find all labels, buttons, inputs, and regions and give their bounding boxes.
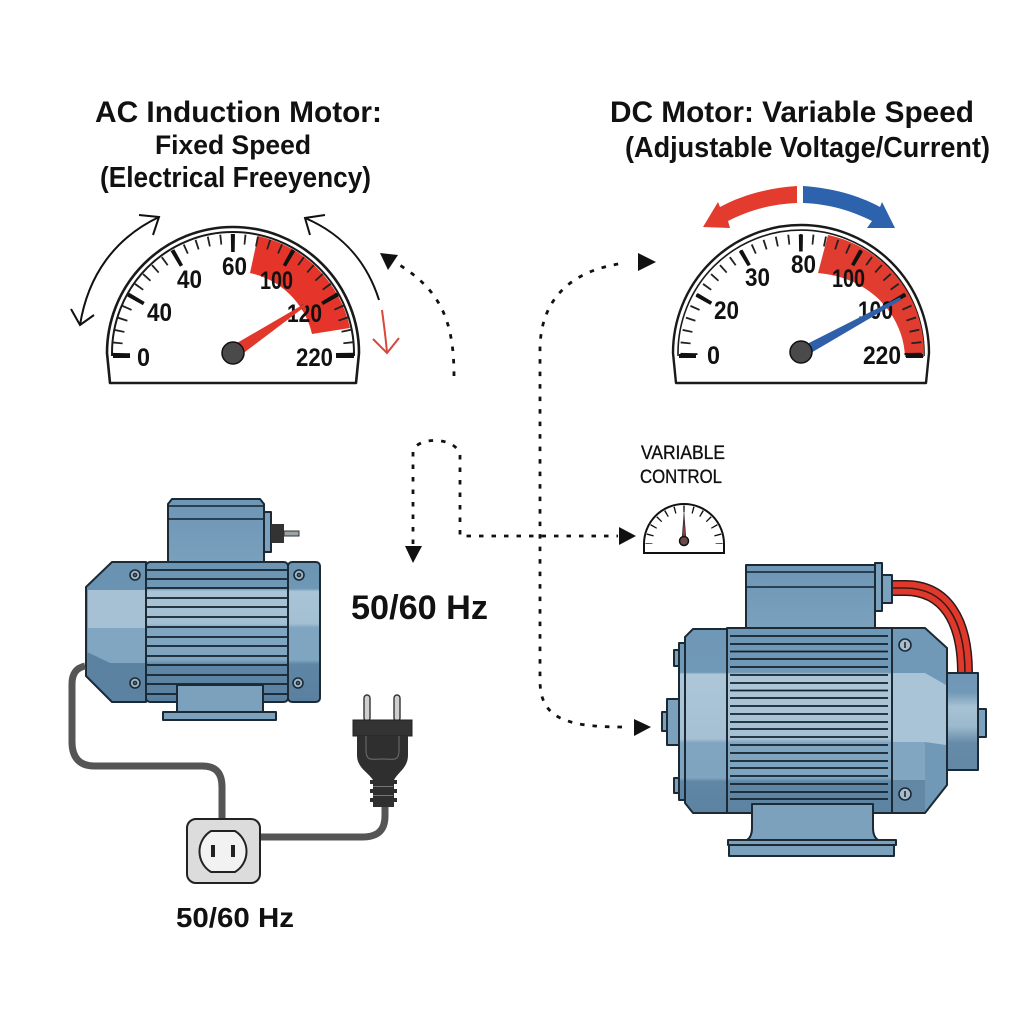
heading: AC induction motor	[95, 96, 382, 194]
red zone	[818, 235, 924, 357]
scale numbers: 100	[832, 265, 865, 293]
scale numbers: 40	[147, 299, 172, 327]
rear end cap	[892, 628, 947, 813]
scale numbers: 30	[745, 264, 770, 292]
needle	[799, 297, 901, 357]
scale numbers: 60	[222, 253, 247, 281]
needle	[230, 293, 323, 358]
terminal box	[746, 563, 892, 629]
label: variable control: CONTROL	[640, 466, 722, 488]
hub	[790, 341, 812, 363]
arrow: double-headed arc left of AC gauge	[71, 215, 159, 325]
mounting foot	[728, 804, 896, 856]
cable: outlet to plug	[260, 805, 385, 837]
arrow: blue right arrow	[803, 186, 895, 228]
scale numbers: 100	[260, 267, 293, 295]
scale numbers: 20	[714, 297, 739, 325]
bolts	[130, 570, 304, 688]
gauge: DC variable speed	[673, 225, 929, 383]
arrow: dotted to DC gauge and DC motor	[540, 253, 656, 736]
terminal box	[168, 499, 299, 570]
red zone	[250, 236, 350, 334]
scale numbers: 80	[791, 251, 816, 279]
scale numbers: 40	[177, 266, 202, 294]
scale numbers	[137, 253, 333, 372]
icon: small control gauge	[644, 504, 724, 553]
front end cap	[86, 562, 146, 702]
bolts	[899, 639, 911, 800]
scale numbers: 0	[707, 342, 720, 370]
illustration: AC motor	[86, 499, 320, 720]
icon: power plug	[353, 695, 412, 807]
ribbed body	[146, 562, 288, 702]
scale numbers: 220	[863, 342, 901, 370]
hub	[222, 342, 244, 364]
scale numbers: 100	[858, 297, 893, 325]
rear end cap	[288, 562, 320, 702]
label: 50/60 Hz centre: 50/60 Hz	[351, 589, 488, 627]
gauge: AC fixed speed	[107, 227, 359, 383]
heading: AC induction motor: AC Induction Motor:	[95, 96, 382, 129]
scale numbers: 220	[296, 344, 333, 372]
arrow: arc right of AC gauge	[305, 215, 379, 300]
red power cable	[892, 588, 965, 673]
front end cap	[685, 629, 727, 813]
label: variable control	[640, 442, 725, 488]
cable: motor to outlet	[72, 666, 222, 820]
heading: AC induction motor: (Electrical Freeyency)	[100, 162, 371, 194]
scale numbers	[707, 251, 901, 370]
label: 50/60 Hz under outlet: 50/60 Hz	[176, 902, 294, 933]
shaft end and front plate	[662, 643, 686, 800]
heading: DC motor	[610, 96, 990, 164]
ribbed body	[727, 628, 892, 813]
arrow: dotted U line to 50/60 Hz and variable control	[405, 440, 636, 563]
heading: DC motor: DC Motor: Variable Speed	[610, 96, 974, 129]
mounting foot	[163, 685, 276, 720]
label: variable control: VARIABLE	[641, 442, 725, 464]
arrow: red down arrow	[373, 310, 399, 353]
icon: wall outlet	[187, 819, 260, 883]
rear housing	[947, 673, 986, 770]
arrow: red left arrow	[703, 186, 797, 228]
heading: DC motor: (Adjustable Voltage/Current)	[625, 132, 990, 164]
illustration: DC motor	[662, 563, 986, 856]
scale numbers: 0	[137, 344, 150, 372]
heading: AC induction motor: Fixed Speed	[155, 130, 311, 160]
scale numbers: 120	[287, 300, 322, 328]
arrow: dotted to AC gauge	[380, 253, 454, 376]
